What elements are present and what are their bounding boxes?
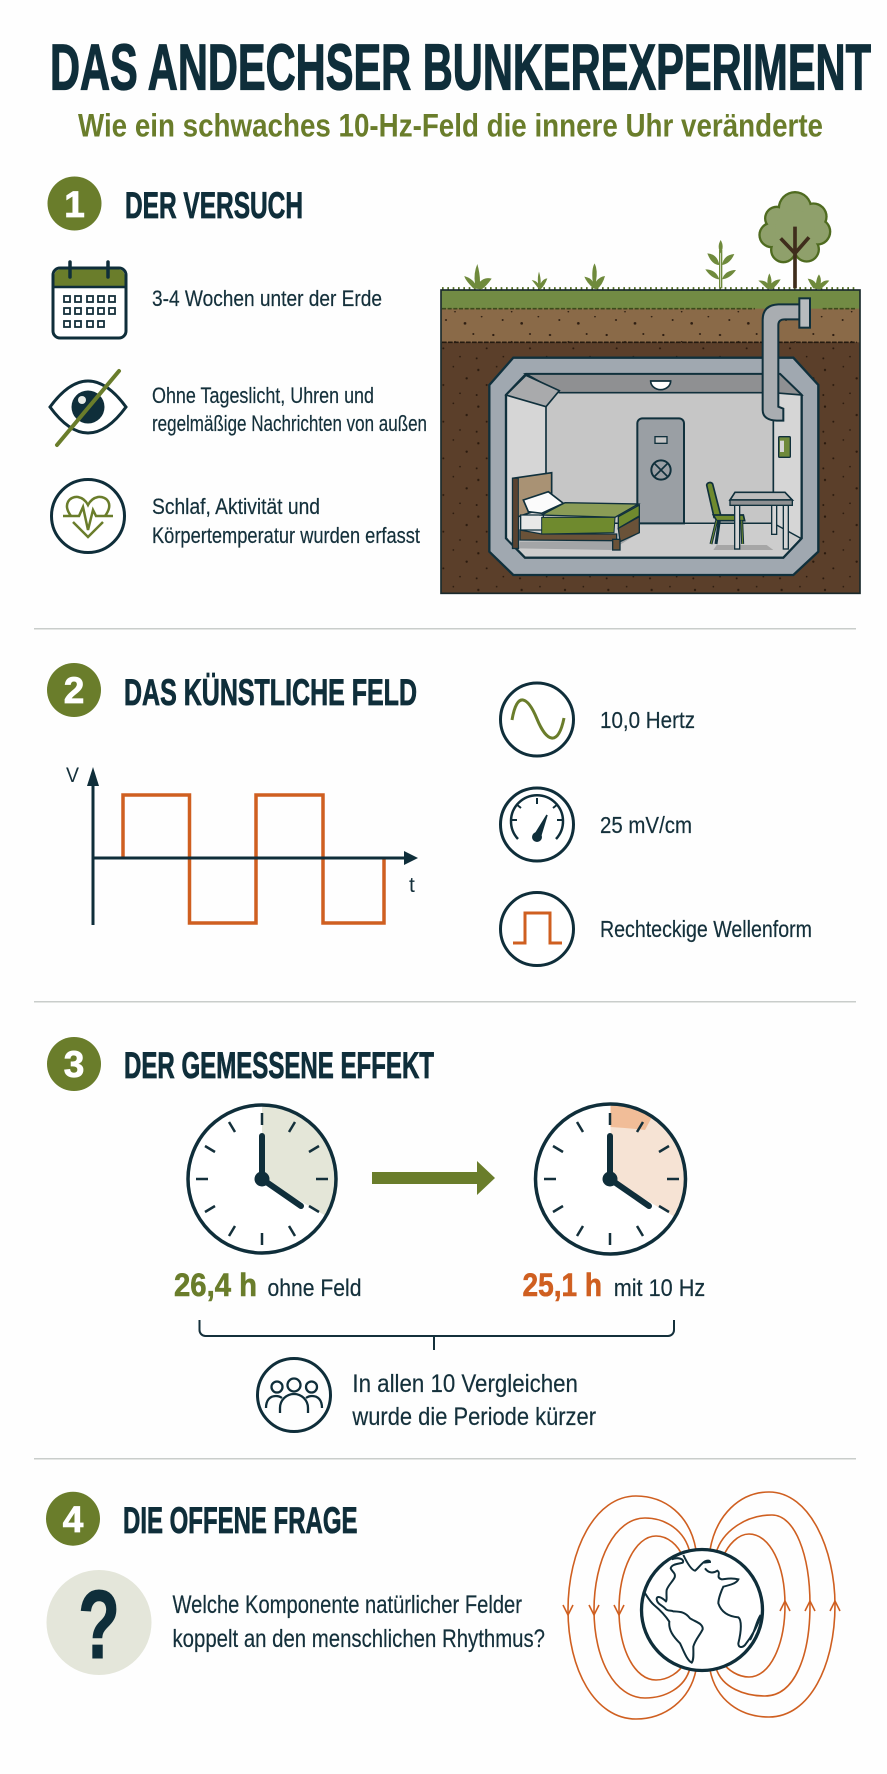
section number 4 — [46, 1492, 100, 1546]
text: open question: koppelt an den menschlichen Rhythmus? — [172, 1625, 545, 1653]
bracket — [200, 1320, 674, 1350]
axis label t: t — [409, 874, 415, 897]
text: open question: Welche Komponente natürlicher Felder — [172, 1591, 522, 1619]
axes — [87, 767, 418, 925]
ventilation pipe — [763, 298, 810, 421]
chair — [707, 483, 773, 550]
door — [637, 418, 684, 523]
text: all comparisons: In allen 10 Vergleichen — [352, 1370, 578, 1398]
text: measurements — [152, 494, 420, 548]
text: open question — [172, 1591, 545, 1653]
text: duration: 3-4 Wochen unter der Erde — [152, 286, 382, 311]
text: all comparisons — [352, 1370, 596, 1431]
icon: people group — [258, 1358, 330, 1432]
label: 25,1 h with 10 Hz: 25,1 h — [522, 1267, 602, 1303]
panel: section 4 die offene Frage — [46, 1492, 840, 1719]
icon: heart monitor — [52, 480, 124, 552]
icon: gauge — [500, 788, 574, 861]
text: measurements: Schlaf, Aktivität und — [152, 494, 320, 519]
globe — [642, 1550, 762, 1670]
label: 26,4 h without field — [174, 1267, 362, 1303]
divider — [34, 1001, 856, 1002]
continents — [644, 1555, 761, 1663]
text: isolation: regelmäßige Nachrichten von außen — [152, 411, 427, 436]
label: 25,1 h with 10 Hz — [522, 1267, 705, 1303]
text: field strength: 25 mV/cm — [600, 812, 692, 838]
divider — [34, 1458, 856, 1460]
section number 3: 3 — [64, 1044, 84, 1085]
clock: with 10 Hz — [536, 1104, 686, 1254]
wall device — [779, 437, 790, 457]
room interior — [506, 374, 802, 558]
wave — [123, 795, 384, 923]
diagram: earth magnetic field — [563, 1492, 840, 1719]
text: isolation — [152, 383, 427, 436]
icon: rectangular pulse — [500, 892, 574, 966]
section number 4: 4 — [63, 1499, 84, 1540]
tree — [758, 191, 831, 288]
text: all comparisons: wurde die Periode kürzer — [352, 1403, 596, 1431]
text: waveform: Rechteckige Wellenform — [600, 916, 812, 942]
heading: die offene Frage: DIE OFFENE FRAGE — [123, 1500, 358, 1541]
icon: sine wave — [500, 683, 574, 756]
axis label V: V — [66, 764, 79, 787]
clock: without field — [188, 1105, 336, 1253]
heading: der Versuch: DER VERSUCH — [125, 185, 303, 226]
chart: square wave — [66, 764, 418, 925]
icon: question mark — [46, 1570, 152, 1679]
section number 1 — [48, 176, 102, 230]
label: 26,4 h without field: ohne Feld — [268, 1275, 362, 1302]
text: measurements: Körpertemperatur wurden erfasst — [152, 523, 420, 548]
icon: calendar — [53, 262, 126, 338]
soil layers — [441, 288, 860, 593]
panel: section 1 der Versuch — [48, 176, 860, 593]
icon: question mark: ? — [78, 1570, 120, 1679]
heading: das künstliche Feld: DAS KÜNSTLICHE FELD — [124, 672, 417, 713]
plants — [464, 240, 829, 289]
divider — [34, 628, 856, 630]
label: 25,1 h with 10 Hz: mit 10 Hz — [614, 1275, 705, 1302]
heading: der gemessene Effekt: DER GEMESSENE EFFEKT — [124, 1045, 434, 1086]
icon: crossed-out eye — [50, 371, 126, 445]
section number 2 — [47, 663, 101, 717]
section number 2: 2 — [64, 670, 84, 711]
field lines — [563, 1492, 840, 1719]
panel: section 3 der gemessene Effekt — [47, 1037, 705, 1432]
ceiling lamp — [651, 381, 671, 390]
section number 3 — [47, 1037, 101, 1091]
text: frequency: 10,0 Hertz — [600, 707, 695, 733]
concrete shell — [489, 358, 818, 575]
section number 1: 1 — [64, 184, 85, 225]
bed — [513, 473, 639, 550]
illustration: underground bunker cross-section — [441, 191, 860, 593]
label: 26,4 h without field: 26,4 h — [174, 1267, 257, 1303]
panel: section 2 das künstliche Feld — [47, 663, 812, 966]
text: isolation: Ohne Tageslicht, Uhren und — [152, 383, 374, 408]
arrow — [372, 1161, 495, 1195]
table — [730, 492, 792, 549]
